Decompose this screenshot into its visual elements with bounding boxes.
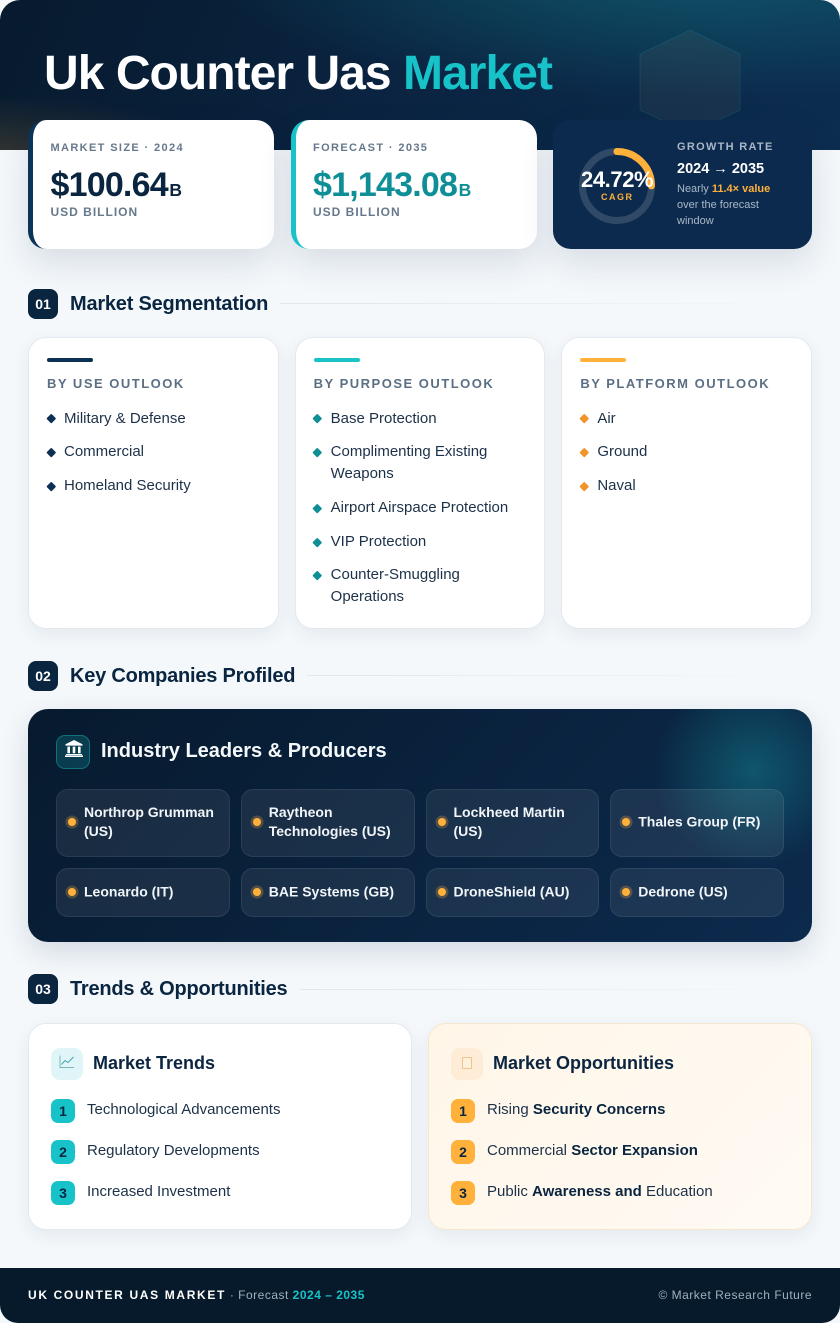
- stat card: forecast: $1,143.08B: [313, 166, 471, 204]
- panel: by purpose outlook: Base Protection: [331, 410, 437, 427]
- icon: opportunity: [451, 1048, 483, 1080]
- company chip: [610, 789, 784, 857]
- panel: by use outlook: Commercial: [64, 443, 144, 460]
- opportunity item: Commercial Sector Expansion: [487, 1142, 698, 1159]
- panel heading: BY PLATFORM OUTLOOK: [580, 376, 770, 391]
- growth note: Nearly 11.4× value: [677, 183, 770, 195]
- company chip: Northrop Grumman: [84, 804, 214, 820]
- panel: by purpose outlook: Operations: [331, 588, 404, 605]
- company chip: [241, 868, 414, 917]
- panel: industry leaders: [28, 709, 812, 942]
- panel heading: BY USE OUTLOOK: [47, 376, 185, 391]
- growth note: over the forecast: [677, 199, 759, 211]
- icon: chart: [51, 1048, 83, 1080]
- company chip: (US): [84, 823, 113, 839]
- panel: by platform outlook: [561, 337, 812, 629]
- number badge: 2: [59, 1144, 67, 1160]
- CAGR ring: [579, 148, 655, 224]
- panel: by use outlook: [28, 337, 279, 629]
- decorative hexagon: [640, 30, 740, 120]
- panel: market trends: [28, 1023, 412, 1230]
- CAGR label: CAGR: [601, 192, 634, 202]
- panel: by purpose outlook: [295, 337, 545, 629]
- stat card: forecast: USD BILLION: [313, 205, 401, 219]
- company chip: [56, 868, 230, 917]
- footer title: UK COUNTER UAS MARKET · Forecast 2024 – 2035: [28, 1288, 365, 1302]
- trend item: Regulatory Developments: [87, 1142, 260, 1159]
- company chip: [56, 789, 230, 857]
- stat card: market size: $100.64B: [50, 166, 182, 204]
- panel: by purpose outlook: Complimenting Existing: [331, 443, 487, 460]
- panel heading: BY PURPOSE OUTLOOK: [314, 376, 494, 391]
- section number 02: 02: [35, 668, 51, 684]
- opportunity item: Public Awareness and Education: [487, 1183, 713, 1200]
- panel: by use outlook: Military & Defense: [64, 410, 186, 427]
- number badge: 3: [59, 1185, 67, 1201]
- footer: [0, 1268, 840, 1323]
- stat card: forecast: [291, 120, 537, 249]
- section number 03: 03: [35, 981, 51, 997]
- company chip: (US): [454, 823, 482, 839]
- panel: by platform outlook: Air: [597, 410, 616, 427]
- opportunity item: Rising Security Concerns: [487, 1101, 665, 1118]
- trend item: Increased Investment: [87, 1183, 230, 1200]
- number badge: 3: [459, 1185, 467, 1201]
- number badge: [451, 1140, 475, 1164]
- stat card: market size: MARKET SIZE · 2024: [50, 142, 184, 154]
- panel heading: Industry Leaders & Producers: [101, 740, 387, 762]
- company chip: Raytheon: [269, 804, 333, 820]
- company chip: [241, 789, 414, 857]
- header banner: [0, 0, 840, 150]
- stat card: forecast: FORECAST · 2035: [313, 142, 428, 154]
- panel: by purpose outlook: VIP Protection: [331, 533, 426, 550]
- company chip: [610, 868, 784, 917]
- panel: by platform outlook: Ground: [597, 443, 647, 460]
- panel: by use outlook: Homeland Security: [64, 477, 191, 494]
- company chip: Dedrone (US): [638, 883, 728, 899]
- company chip: Lockheed Martin: [454, 804, 565, 820]
- section number 03: [28, 974, 58, 1004]
- section heading: key companies: Key Companies Profiled: [70, 665, 295, 687]
- number badge: [51, 1181, 75, 1205]
- panel: by purpose outlook: Airport Airspace Protection: [331, 499, 508, 516]
- company chip: DroneShield (AU): [454, 883, 569, 899]
- section heading: market segmentation: Market Segmentation: [70, 293, 268, 315]
- company chip: BAE Systems (GB): [269, 883, 394, 899]
- section number 01: 01: [35, 296, 51, 312]
- panel: by platform outlook: Naval: [597, 477, 636, 494]
- company chip: Technologies (US): [269, 823, 391, 839]
- company chip: [426, 868, 599, 917]
- number badge: [451, 1099, 475, 1123]
- trend item: Technological Advancements: [87, 1101, 280, 1118]
- company chip: Leonardo (IT): [84, 883, 173, 899]
- stat card: growth rate: [553, 120, 812, 249]
- growth note: window: [677, 215, 714, 227]
- panel: by purpose outlook: Counter-Smuggling: [331, 566, 460, 583]
- number badge: 1: [59, 1103, 67, 1119]
- growth years: 2024 → 2035: [677, 161, 764, 177]
- section heading: trends: Trends & Opportunities: [70, 978, 287, 1000]
- company chip: [426, 789, 599, 857]
- company chip: Thales Group (FR): [638, 814, 760, 830]
- number badge: [451, 1181, 475, 1205]
- CAGR value: 24.72%: [581, 167, 653, 192]
- panel heading: Market Opportunities: [493, 1053, 674, 1073]
- icon: bank building: [56, 735, 90, 769]
- footer credit: © Market Research Future: [658, 1288, 812, 1302]
- number badge: 2: [459, 1144, 467, 1160]
- growth rate label: GROWTH RATE: [677, 141, 774, 153]
- panel: by purpose outlook: Weapons: [331, 465, 394, 482]
- number badge: [51, 1099, 75, 1123]
- section number 01: [28, 289, 58, 319]
- number badge: [51, 1140, 75, 1164]
- stat card: market size: USD BILLION: [50, 205, 138, 219]
- number badge: 1: [459, 1103, 467, 1119]
- growth note: [677, 183, 770, 227]
- stat card: market size: [28, 120, 274, 249]
- section number 02: [28, 661, 58, 691]
- panel: market opportunities: [428, 1023, 812, 1230]
- title: Uk Counter Uas Market: [44, 47, 552, 100]
- panel heading: Market Trends: [93, 1053, 215, 1073]
